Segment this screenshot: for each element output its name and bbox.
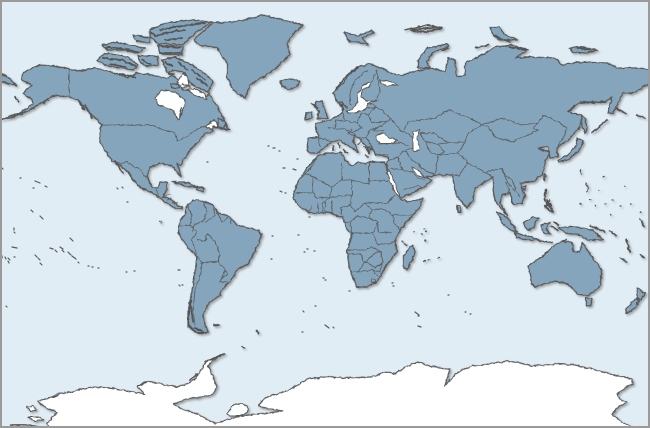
Eurasia bbox=[305, 25, 650, 243]
North America bbox=[0, 15, 303, 209]
Gulf of St Lawrence bbox=[204, 120, 219, 129]
Pacific island chain bbox=[580, 170, 641, 215]
Victoria Island bbox=[97, 53, 138, 70]
national borders bbox=[295, 157, 413, 277]
Chile fjords bbox=[189, 300, 206, 333]
Ireland bbox=[305, 112, 312, 120]
continent: Eurasia bbox=[307, 45, 650, 215]
Africa bbox=[293, 153, 439, 287]
New Siberian Islands bbox=[570, 47, 597, 53]
continent: Africa bbox=[293, 153, 423, 287]
Baltic Sea and Gulf of Bothnia bbox=[346, 82, 378, 113]
New Caledonia and Melanesia bbox=[620, 219, 644, 262]
Sri Lanka bbox=[457, 205, 461, 212]
Franz Josef Land bbox=[405, 25, 442, 32]
Oceania bbox=[528, 219, 646, 313]
Greenland bbox=[193, 15, 303, 98]
Cuba bbox=[172, 182, 197, 187]
Severnaya Zemlya bbox=[490, 27, 518, 40]
Hokkaido and Honshu bbox=[558, 138, 583, 162]
Somerset and Prince of Wales Islands bbox=[138, 56, 158, 66]
Madagascar bbox=[403, 245, 415, 270]
Tasmania bbox=[585, 298, 592, 306]
Iceland bbox=[280, 79, 300, 89]
Hainan bbox=[522, 186, 526, 190]
Taiwan bbox=[544, 174, 546, 180]
USA Canada border, Alaska border, Mexico border bbox=[69, 69, 212, 178]
Novaya Zemlya bbox=[418, 44, 449, 68]
Black Sea bbox=[376, 133, 398, 143]
New Guinea bbox=[558, 227, 603, 240]
Philippines bbox=[544, 190, 553, 212]
Central America borders bbox=[156, 188, 178, 204]
Greek islands and Aegean detail bbox=[333, 143, 372, 157]
Newfoundland bbox=[218, 118, 226, 128]
New Zealand South Island bbox=[626, 298, 639, 313]
Indian Ocean islands bbox=[402, 229, 439, 261]
Svalbard bbox=[344, 30, 374, 45]
Iran, Iraq and Arabia borders bbox=[375, 148, 438, 190]
Solomon and Indonesian islands bbox=[540, 222, 616, 243]
national borders bbox=[180, 201, 231, 325]
Borneo bbox=[523, 217, 538, 230]
European borders bbox=[318, 70, 408, 147]
Aleutians and coast detail bbox=[15, 97, 228, 173]
South America bbox=[159, 200, 262, 348]
Sulawesi bbox=[541, 222, 550, 234]
Hudson Strait bbox=[187, 89, 207, 99]
Galapagos bbox=[159, 221, 162, 223]
Chukotka edge piece bbox=[0, 73, 17, 86]
Persian Gulf bbox=[412, 167, 425, 178]
Java bbox=[515, 233, 540, 240]
Sakhalin bbox=[581, 115, 587, 134]
South Georgia and South Atlantic islands bbox=[242, 331, 259, 348]
Sumatra bbox=[497, 212, 517, 232]
Sverdrup Islands bbox=[133, 35, 150, 43]
Southampton Island bbox=[170, 84, 180, 88]
Hispaniola bbox=[197, 187, 205, 191]
Ellesmere Island bbox=[150, 20, 212, 45]
scattered Pacific islands bbox=[2, 168, 183, 307]
White Sea bbox=[380, 80, 398, 86]
Lesotho bbox=[371, 279, 375, 283]
Russia southern border and Mongolia bbox=[482, 115, 567, 148]
Hudson Bay bbox=[155, 90, 185, 120]
Devon Island bbox=[158, 45, 183, 55]
New Zealand North Island bbox=[637, 288, 646, 300]
continent: North America bbox=[2, 65, 229, 209]
Baffin Island bbox=[162, 57, 213, 92]
Falkland Islands bbox=[214, 324, 219, 326]
Scandinavian and Arctic coast detail bbox=[312, 36, 605, 112]
Atlantic and remote islands bbox=[207, 146, 471, 332]
Foxe Basin bbox=[177, 73, 190, 88]
Red Sea bbox=[387, 167, 400, 197]
Great Britain bbox=[314, 101, 328, 119]
Caspian Sea bbox=[413, 130, 420, 152]
Antarctica bbox=[10, 354, 633, 428]
China and South Asia borders bbox=[452, 142, 520, 197]
Kuril and Aleutian chain bbox=[592, 108, 645, 133]
Arctic archipelago detail bbox=[103, 23, 208, 87]
continent: South America bbox=[178, 200, 262, 334]
Parry Islands bbox=[102, 42, 145, 53]
Kazakhstan and Central Asia borders bbox=[404, 110, 482, 155]
Australia bbox=[528, 242, 602, 296]
